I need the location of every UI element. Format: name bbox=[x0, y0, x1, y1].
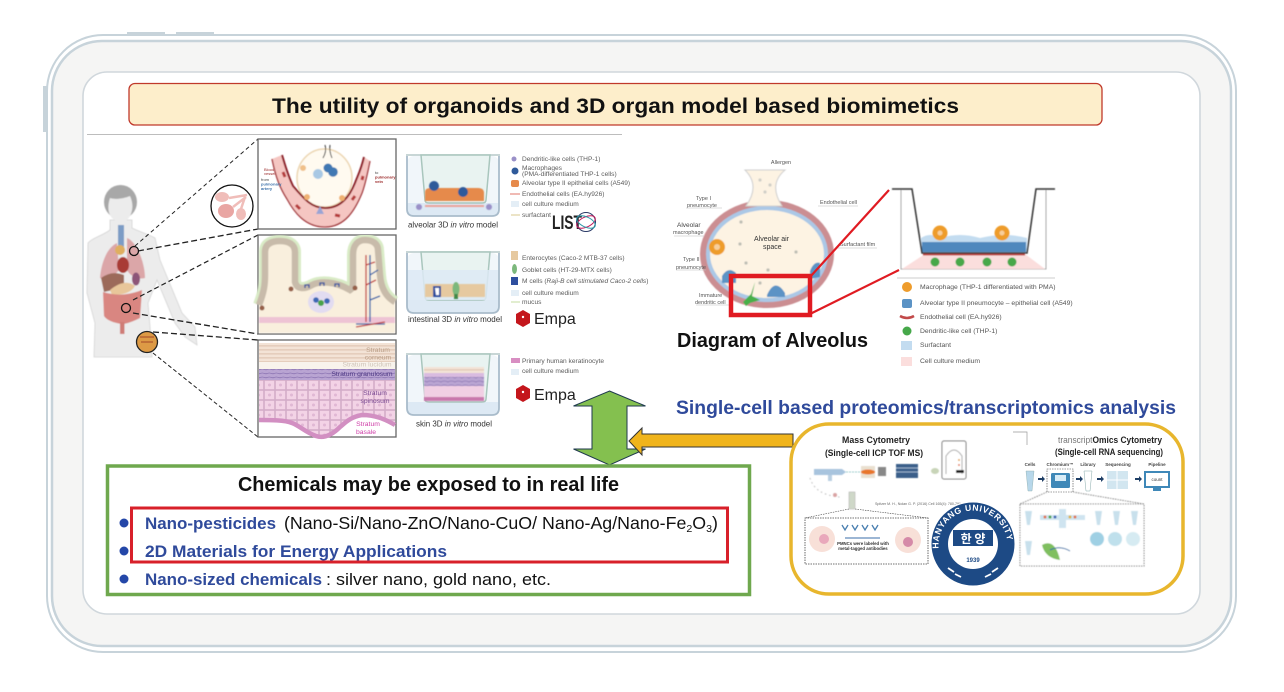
yellow arrow bbox=[629, 428, 793, 455]
vessel labels: Blood bbox=[264, 167, 274, 172]
alveolus diagram bbox=[700, 170, 834, 308]
nano-pesticides formula: 2 bbox=[686, 523, 692, 535]
intestinal 3D model well: intestinal 3D in vitro model bbox=[408, 314, 502, 324]
alveolus labels: Immature bbox=[699, 293, 722, 299]
vessel labels: vein bbox=[375, 179, 384, 184]
intestinal legend: Goblet cells (HT-29-MTX cells) bbox=[522, 267, 612, 274]
Empa logo: Empa bbox=[534, 311, 576, 328]
intestinal legend: Enterocytes (Caco-2 MTB-37 cells) bbox=[522, 255, 625, 262]
2D materials line: 2D Materials for Energy Applications bbox=[145, 542, 447, 561]
pneumocytes bbox=[722, 263, 820, 297]
alveolus labels: dendritic cell bbox=[695, 300, 726, 306]
lungs bbox=[100, 238, 145, 279]
heart bbox=[117, 257, 129, 273]
Hanyang University seal: 1939 bbox=[966, 558, 980, 564]
skin layer labels: basale bbox=[356, 429, 376, 436]
stomach bbox=[110, 283, 135, 295]
panel: skin tissue bbox=[258, 340, 396, 437]
alveolus labels: macrophage bbox=[673, 230, 704, 236]
nano-sized examples: : silver nano, gold nano, etc. bbox=[326, 570, 551, 589]
alveolus labels: space bbox=[763, 244, 782, 251]
insert legend: Surfactant bbox=[920, 342, 951, 349]
vessel labels bbox=[261, 167, 396, 191]
skin legend: cell culture medium bbox=[522, 368, 579, 375]
skin legend bbox=[511, 358, 604, 375]
skin 3D model well: skin 3D in vitro model bbox=[416, 418, 492, 428]
chemicals heading: Chemicals may be exposed to in real life bbox=[238, 474, 619, 496]
alveolar legend bbox=[510, 156, 630, 219]
Empa logo bbox=[516, 385, 576, 404]
alveolar legend: Endothelial cells (EA.hy926) bbox=[522, 191, 604, 198]
intestinal legend: mucus bbox=[522, 299, 542, 306]
skin layer labels: Stratum bbox=[363, 390, 387, 397]
nano-pesticides formula: (Nano-Si/Nano-ZnO/Nano-CuO/ Nano-Ag/Nano-Fe bbox=[284, 513, 680, 533]
insert legend: Macrophage (THP-1 differentiated with PMA) bbox=[920, 284, 1056, 291]
transcriptomics heading: transcriptOmics Cytometry bbox=[1058, 435, 1163, 446]
single-cell RNA workflow: Sequencing bbox=[1105, 462, 1131, 467]
head bbox=[104, 185, 137, 222]
single-cell RNA workflow: Pipeline bbox=[1148, 462, 1166, 467]
vessel labels: from bbox=[261, 177, 270, 182]
intestine bbox=[103, 290, 142, 324]
transcriptomics heading: (Single-cell RNA sequencing) bbox=[1055, 447, 1163, 458]
human body with organs bbox=[87, 185, 197, 357]
alveolar legend: (PMA-differentiated THP-1 cells) bbox=[522, 171, 617, 178]
skin layer labels bbox=[331, 347, 393, 436]
mass cytometry heading: Mass Cytometry bbox=[842, 435, 911, 446]
Hanyang University seal: 한 양 bbox=[961, 530, 985, 547]
red zoom box and connectors bbox=[731, 190, 899, 315]
alveolar legend: Dendritic-like cells (THP-1) bbox=[522, 156, 600, 163]
dashed callout lines bbox=[133, 139, 258, 437]
lung alveoli circle bbox=[211, 185, 253, 227]
Empa logo: Empa bbox=[534, 387, 576, 404]
alveolus labels: Type II bbox=[683, 257, 700, 263]
vessel labels: pulmonary bbox=[375, 174, 396, 180]
Hanyang University seal bbox=[932, 502, 1014, 586]
alveolus labels: pneumocyte bbox=[687, 203, 717, 209]
Hanyang University seal: HANYANG UNIVERSITY bbox=[932, 504, 1014, 548]
mass cytometry heading: (Single-cell ICP TOF MS) bbox=[825, 448, 923, 459]
intestinal legend: M cells (Raji-B cell stimulated Caco-2 cells) bbox=[522, 278, 648, 285]
insert well diagram bbox=[892, 189, 1055, 269]
alveolar legend: cell culture medium bbox=[522, 201, 579, 208]
nano-pesticides line: Nano-pesticides bbox=[145, 514, 276, 533]
Empa logo bbox=[516, 310, 576, 328]
labelled cells dashed box: PMNCs were labeled with bbox=[837, 541, 889, 546]
small citation: Spitzer M. H., Nolan G. P. (2016) Cell 165(4): 780-791 bbox=[875, 502, 961, 506]
alveolus labels bbox=[673, 160, 877, 306]
skin layer labels: Stratum lucidum bbox=[342, 362, 392, 368]
panel: alveolus tissue bbox=[258, 139, 396, 229]
trachea bbox=[118, 225, 124, 247]
alveolar legend: Macrophages bbox=[522, 165, 563, 172]
insert legend: Cell culture medium bbox=[920, 358, 980, 365]
vessel labels: vessel bbox=[264, 171, 275, 176]
alveolar 3D model well: alveolar 3D in vitro model bbox=[408, 220, 498, 230]
skin layer labels: corneum bbox=[365, 354, 392, 362]
spleen bbox=[132, 272, 140, 286]
intestinal legend bbox=[511, 251, 648, 306]
panel: intestine tissue bbox=[258, 235, 396, 334]
alveolus labels: Alveolar air bbox=[754, 236, 790, 243]
LIST logo: LIST bbox=[552, 213, 582, 234]
heading: single-cell analysis: Single-cell based proteomics/transcriptomics analysis bbox=[676, 397, 1176, 419]
transcriptomics heading bbox=[1055, 435, 1163, 458]
nano-pesticides formula: O bbox=[692, 513, 706, 533]
alveolus labels: pneumocyte bbox=[676, 265, 706, 271]
single-cell RNA workflow: count bbox=[1151, 477, 1163, 482]
green double arrow bbox=[574, 391, 646, 465]
skin layer labels: spinosum bbox=[360, 398, 390, 405]
alveolus labels: Alveolar bbox=[677, 222, 701, 229]
single-cell RNA workflow bbox=[1025, 462, 1169, 492]
nano-sized line: Nano-sized chemicals bbox=[145, 570, 322, 589]
single-cell RNA workflow: Cells bbox=[1025, 462, 1036, 467]
skin layer labels: Stratum bbox=[356, 421, 380, 428]
alveolus labels: Surfactant film bbox=[840, 242, 876, 248]
alveolus labels: Allergen bbox=[771, 160, 791, 166]
insert legend bbox=[900, 282, 1073, 366]
alveolar legend: Alveolar type II epithelial cells (A549) bbox=[522, 180, 630, 187]
vessel labels: to bbox=[375, 170, 379, 175]
organ marker circles bbox=[122, 246, 158, 352]
alveolar legend: surfactant bbox=[522, 212, 551, 219]
insert legend: Alveolar type II pneumocyte – epithelial cell (A549) bbox=[920, 300, 1073, 307]
title banner bbox=[129, 84, 1102, 125]
vessel labels: artery bbox=[261, 186, 273, 191]
heading: Diagram of Alveolus: Diagram of Alveolus bbox=[677, 330, 868, 352]
panel: chemicals bbox=[108, 466, 750, 594]
alveolus labels: Endothelial cell bbox=[820, 200, 857, 206]
skin layer labels: Stratum bbox=[366, 347, 390, 354]
title banner: The utility of organoids and 3D organ model based biomimetics bbox=[272, 94, 959, 118]
skin layer labels: Stratum granulosum bbox=[331, 371, 393, 378]
panel: cytometry bbox=[789, 422, 1185, 596]
mass cytometry heading bbox=[825, 435, 923, 459]
nano-pesticides formula: 3 bbox=[706, 523, 712, 535]
mass cytometer schematic bbox=[810, 441, 966, 509]
single-cell RNA workflow: Library bbox=[1080, 462, 1096, 467]
labelled cells dashed box bbox=[805, 509, 928, 564]
nano-pesticides formula: ) bbox=[712, 513, 718, 533]
dendritic cell bbox=[743, 282, 760, 306]
skin legend: Primary human keratinocyte bbox=[522, 358, 604, 365]
skin 3D model well bbox=[406, 354, 500, 428]
bullets bbox=[120, 518, 128, 584]
intestinal legend: cell culture medium bbox=[522, 290, 579, 297]
insert legend: Endothelial cell (EA.hy926) bbox=[920, 314, 1002, 321]
intestinal 3D model well bbox=[406, 252, 502, 324]
alveolar 3D model well bbox=[406, 155, 500, 230]
red highlight box bbox=[132, 508, 728, 562]
vessel labels: pulmonary bbox=[261, 182, 282, 186]
single-cell RNA workflow: Chromium™ bbox=[1046, 462, 1074, 467]
RNA sequencing dashed box bbox=[1020, 492, 1144, 566]
macrophage bbox=[709, 239, 725, 255]
insert legend: Dendritic-like cell (THP-1) bbox=[920, 328, 997, 335]
liver bbox=[101, 273, 124, 292]
labelled cells dashed box: metal-tagged antibodies bbox=[838, 546, 888, 551]
alveolus labels: Type I bbox=[696, 196, 711, 202]
